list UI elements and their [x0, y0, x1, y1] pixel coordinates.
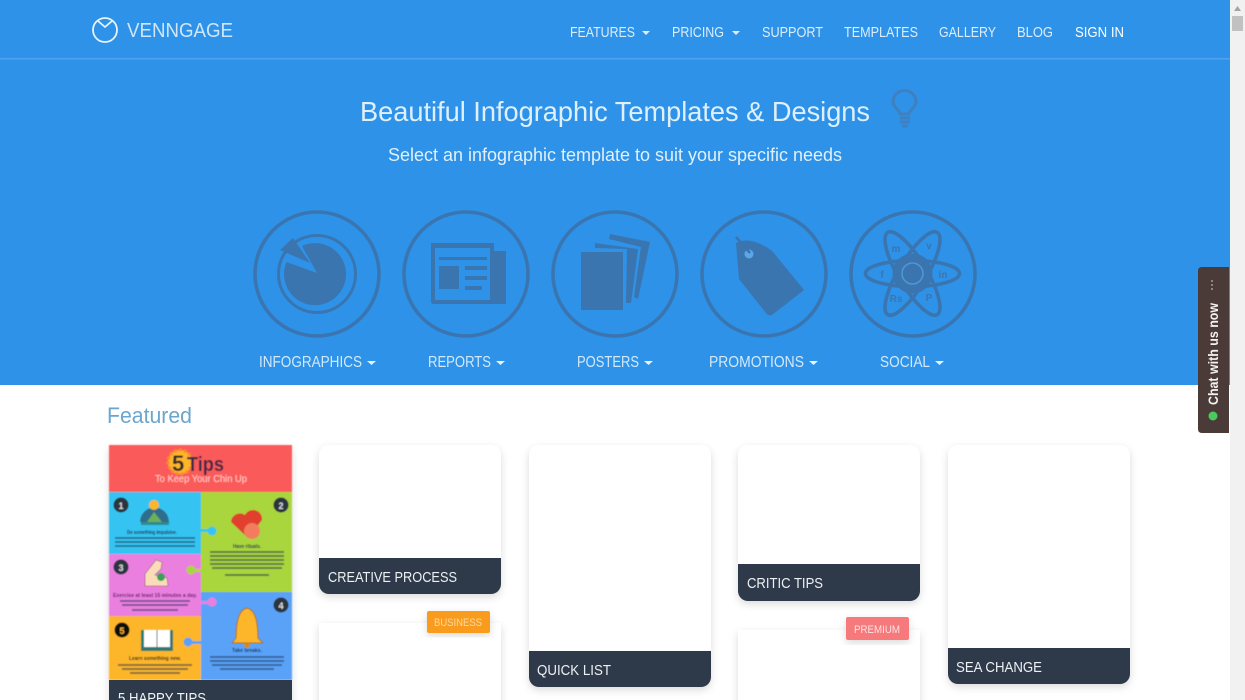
category: social: SOCIAL — [880, 354, 930, 371]
card: critic tips — [738, 445, 920, 601]
category: social: Rs — [890, 294, 903, 305]
badge: premium: PREMIUM — [854, 624, 900, 636]
subtitle: Select an infographic template to suit your specific needs — [388, 144, 842, 165]
navigation: FEATURES — [570, 25, 635, 41]
category: infographics — [255, 212, 379, 371]
connector dots — [184, 526, 216, 646]
card: sea change: SEA CHANGE — [956, 659, 1042, 676]
chat tab: Chat with us now — [1205, 303, 1221, 405]
category: social: f — [880, 270, 884, 281]
navigation: SUPPORT — [762, 25, 823, 41]
card: 5 happy tips — [109, 445, 292, 700]
thumbnail: 5 — [119, 626, 125, 636]
card: critic tips: CRITIC TIPS — [747, 575, 823, 592]
chat tab — [1198, 267, 1229, 433]
header banner — [0, 0, 1230, 385]
thumbnail: To Keep Your Chin Up — [155, 473, 247, 485]
badge: premium — [846, 617, 909, 640]
badge: business — [427, 611, 490, 633]
category: social: m — [892, 244, 901, 255]
thumbnail: Take breaks. — [232, 648, 263, 654]
category: reports — [404, 212, 528, 371]
card: sea change — [948, 445, 1130, 684]
logo — [93, 18, 233, 42]
category: social: v — [926, 241, 932, 252]
thumbnail: 3 — [118, 563, 124, 573]
navigation: PRICING — [672, 25, 724, 41]
navigation: GALLERY — [939, 25, 996, 41]
card: premium — [738, 617, 920, 700]
navigation: TEMPLATES — [844, 25, 918, 41]
category: social — [851, 212, 975, 371]
thumbnail: Tips — [187, 454, 224, 476]
thumbnail: Exercise at least 15 minutes a day. — [113, 593, 198, 599]
logo: VENNGAGE — [127, 20, 233, 42]
category: reports: REPORTS — [428, 354, 491, 371]
title: Beautiful Infographic Templates & Designs — [360, 96, 870, 127]
thumbnail: Learn something new. — [129, 656, 182, 662]
category: infographics: INFOGRAPHICS — [259, 354, 362, 371]
scrollbar — [1230, 0, 1245, 700]
card: business — [319, 611, 501, 700]
icon: light bulb — [893, 90, 916, 126]
thumbnail: 1 — [118, 501, 124, 511]
card: quick list: QUICK LIST — [537, 662, 611, 679]
thumbnail: Have rituals. — [233, 544, 262, 550]
badge: business: BUSINESS — [434, 617, 482, 629]
thumbnail: 4 — [278, 601, 284, 611]
category: posters: POSTERS — [577, 354, 639, 371]
category: promotions — [702, 212, 826, 371]
category: posters — [553, 212, 677, 371]
thumbnail: 5 — [172, 451, 184, 476]
thumbnail: 2 — [278, 501, 284, 511]
navigation — [570, 25, 1124, 41]
card: creative process — [319, 445, 501, 594]
navigation: BLOG — [1017, 25, 1053, 41]
thumbnail: Do something impulsive. — [127, 530, 178, 536]
navigation: SIGN IN — [1075, 25, 1124, 41]
card: creative process: CREATIVE PROCESS — [328, 569, 457, 586]
category: social: in — [939, 270, 947, 281]
category: social: P — [926, 293, 933, 304]
card: quick list — [529, 445, 711, 687]
category: promotions: PROMOTIONS — [709, 354, 804, 371]
thumbnail — [109, 445, 292, 680]
heading: featured: Featured — [107, 403, 192, 428]
